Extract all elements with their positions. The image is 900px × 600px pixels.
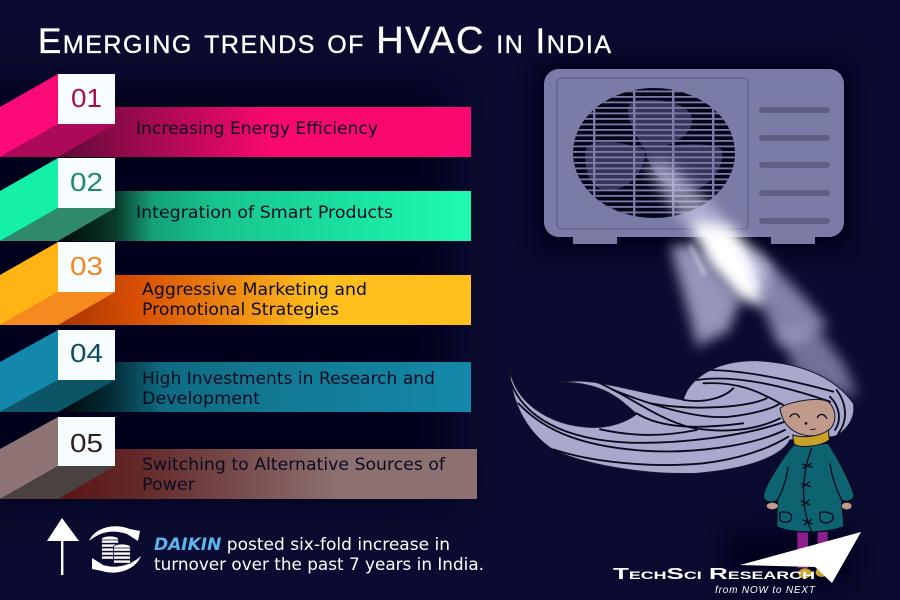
band 04 <box>0 362 471 412</box>
number box 05 <box>58 417 115 466</box>
coat <box>763 443 854 532</box>
number box 03: 03 <box>70 251 103 281</box>
callout: Daikin turnover: turnover over the past 7 years in India. <box>154 555 484 574</box>
grille <box>573 90 735 216</box>
cold air plume <box>645 160 858 398</box>
label 05: Power <box>142 475 195 494</box>
logo tagline: from NOW to NEXT <box>715 585 816 596</box>
label 03: Aggressive Marketing and <box>142 280 367 299</box>
number box 03 <box>58 242 115 292</box>
side faces 05 <box>0 417 115 499</box>
trend 05 <box>0 417 477 499</box>
feet <box>573 232 815 244</box>
title: Emerging trends of HVAC in India <box>38 20 611 62</box>
side faces 04 <box>0 330 115 412</box>
label 01: Increasing Energy Efficiency <box>136 119 378 138</box>
scarf <box>793 430 829 446</box>
number box 01 <box>58 74 115 124</box>
logo wordmark: TechSci Research <box>613 566 815 583</box>
label 02: Integration of Smart Products <box>136 203 393 222</box>
TechSci Research logo <box>613 532 861 596</box>
label 03 <box>142 280 367 319</box>
callout: Daikin turnover: DAIKIN posted six-fold increase in <box>154 535 450 554</box>
face <box>780 399 835 436</box>
label 04: Development <box>142 389 261 408</box>
label 04 <box>142 369 435 408</box>
band 01 <box>0 107 471 157</box>
label 05: Switching to Alternative Sources of <box>142 455 446 474</box>
legs <box>797 532 828 568</box>
label 04: High Investments in Research and <box>142 369 435 388</box>
front panel outline <box>557 78 748 229</box>
side faces 03 <box>0 242 115 325</box>
icon: coins with cycle arrows <box>89 526 141 573</box>
trend 03 <box>0 242 471 325</box>
number box 01: 01 <box>71 83 102 113</box>
side faces 02 <box>0 158 115 241</box>
number box 04 <box>58 330 115 380</box>
number box 02 <box>58 158 115 208</box>
trend 02 <box>0 158 471 241</box>
boots <box>798 568 828 578</box>
number box 04: 04 <box>70 338 103 368</box>
band 05 <box>0 449 477 499</box>
label 05 <box>142 455 446 494</box>
vent slots <box>759 107 830 224</box>
band 02 <box>0 191 471 241</box>
fan blades <box>585 100 722 191</box>
air conditioner outdoor unit <box>544 69 844 244</box>
label 03: Promotional Strategies <box>142 300 339 319</box>
hands <box>766 502 852 510</box>
band 03 <box>0 275 471 325</box>
trend 01 <box>0 74 471 157</box>
fan opening <box>573 88 735 218</box>
callout: Daikin turnover <box>154 535 484 574</box>
side faces 01 <box>0 74 115 157</box>
number box 02: 02 <box>70 167 103 197</box>
trend 04 <box>0 330 471 412</box>
girl with windblown hair <box>510 361 854 578</box>
logo mark <box>740 532 861 583</box>
icon: up arrow <box>47 518 79 575</box>
number box 05: 05 <box>70 428 103 458</box>
hair <box>510 361 854 474</box>
casing <box>544 69 844 237</box>
